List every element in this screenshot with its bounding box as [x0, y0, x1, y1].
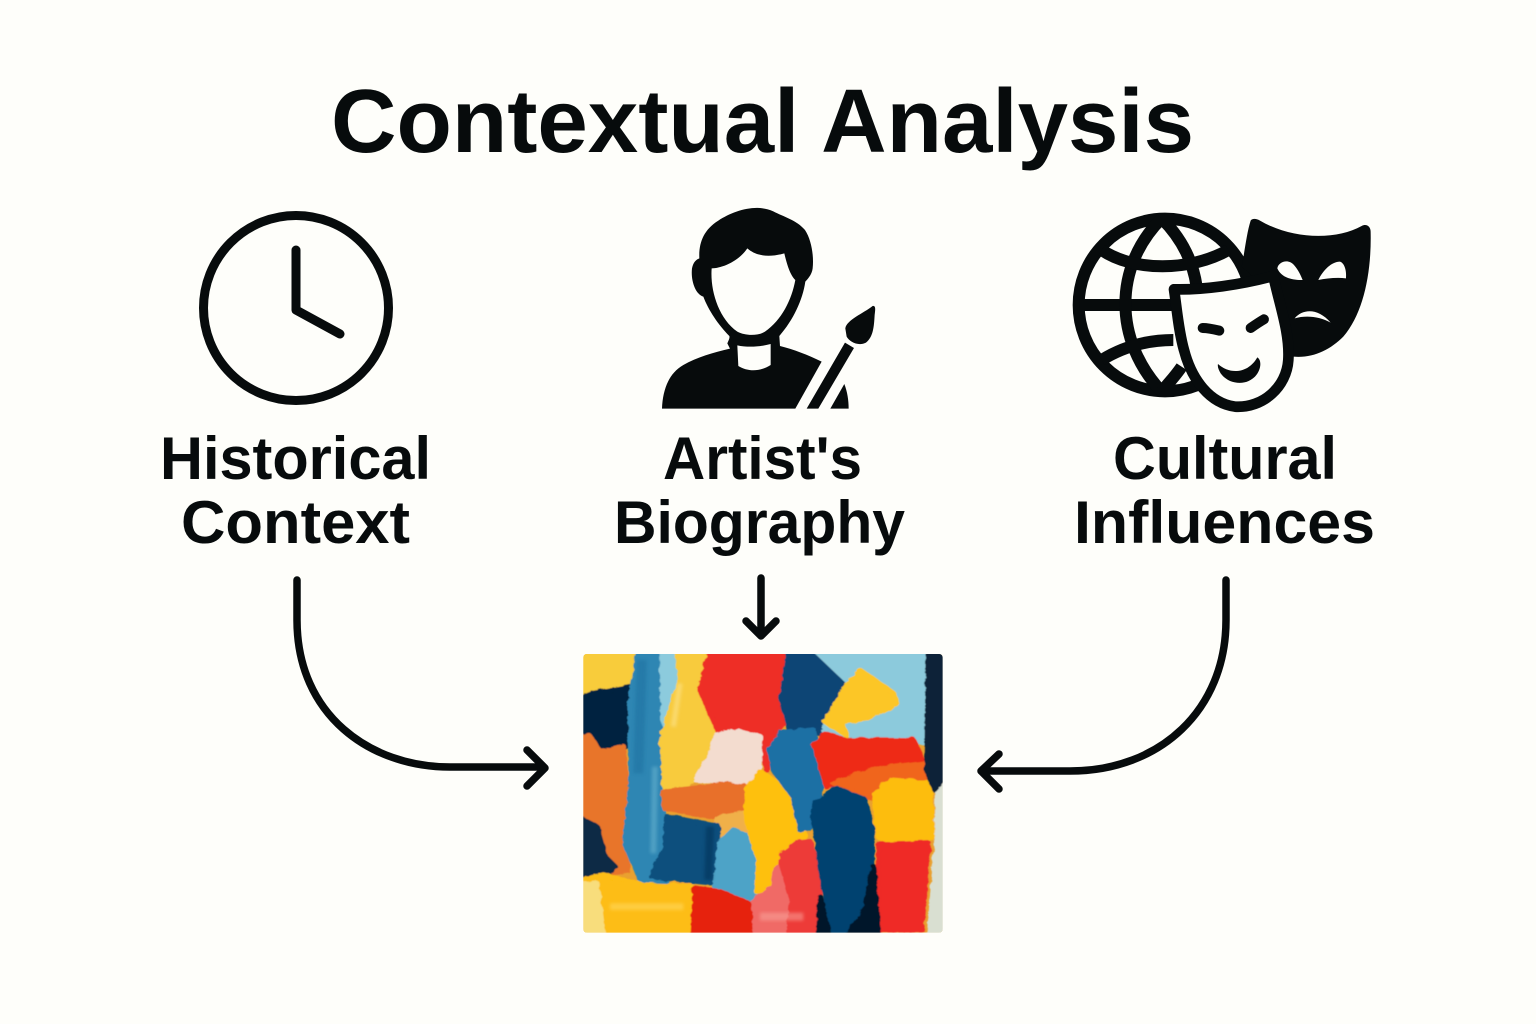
label: Artist's Biography — [614, 425, 906, 556]
brush streaks — [610, 660, 803, 917]
globe — [1079, 218, 1251, 392]
arrow: historical context to painting — [297, 580, 545, 786]
title: Contextual Analysis — [331, 72, 1194, 172]
label: Artist's Biography: Artist's — [663, 425, 862, 492]
icon: globe and theatre masks — [1079, 218, 1371, 407]
arrow: artist's biography to painting — [746, 578, 776, 636]
icon: clock — [204, 216, 388, 400]
happy mask — [1174, 276, 1288, 407]
label: Historical Context: Historical — [160, 425, 431, 492]
sad mask — [1242, 219, 1371, 357]
label: Historical Context: Context — [181, 489, 410, 556]
icon: artist with paintbrush — [662, 208, 875, 409]
label: Cultural Influences: Influences — [1074, 489, 1375, 556]
label: Artist's Biography: Biography — [614, 489, 906, 556]
label: Cultural Influences: Cultural — [1113, 425, 1337, 492]
arrow: cultural influences to painting — [981, 580, 1226, 789]
abstract painting — [577, 647, 947, 937]
label: Cultural Influences — [1074, 425, 1375, 556]
label: Historical Context — [160, 425, 431, 556]
